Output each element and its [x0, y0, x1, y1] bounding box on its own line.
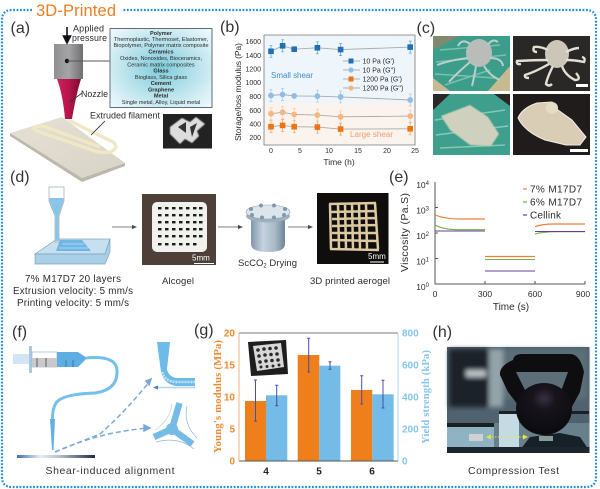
alcogel photo [142, 194, 216, 265]
label h: (h) [432, 324, 452, 341]
x axis ticks: 5 [298, 148, 302, 155]
y axis title: Storage/loss modulus (Pa) [233, 43, 243, 141]
axes [435, 182, 585, 284]
right axis ticks: 400 [402, 392, 419, 404]
panel: f, shear alignment schematic [12, 324, 197, 477]
legend [343, 58, 403, 92]
materials box [110, 28, 212, 108]
y axis ticks: 2 [426, 232, 430, 238]
panel: g, bar chart [194, 322, 432, 478]
left axis title: Young's modulus (MPa) [213, 340, 224, 453]
y axis ticks: 10 [416, 256, 426, 266]
print head cylinder [54, 44, 83, 79]
y axis ticks: 10 [416, 282, 426, 292]
x axis ticks [433, 289, 590, 299]
panel: c, printed octopus and part photos [416, 20, 590, 155]
y axis ticks: 1400 [245, 53, 261, 60]
x axis title: Time (h) [323, 157, 355, 167]
label g: (g) [194, 322, 214, 339]
y axis ticks: 1200 [245, 66, 261, 74]
arrow to alcogel [112, 225, 136, 229]
drying caption: Drying [267, 258, 297, 269]
y axis ticks: 800 [249, 94, 261, 101]
right axis ticks [402, 328, 419, 468]
legend: 10 Pa (G'') [362, 67, 396, 74]
materials box: Single metal, Alloy, Liquid metal [122, 100, 200, 106]
blue bars [266, 366, 394, 461]
inset lattice photo [248, 340, 288, 376]
x axis ticks: 900 [576, 289, 590, 299]
label b: (b) [220, 19, 240, 36]
title: 3D-Printed [36, 2, 116, 20]
photo: cream part on black [513, 94, 590, 155]
left axis ticks: 20 [224, 328, 235, 340]
arrow to aerogel [288, 225, 312, 229]
pointer dot and line [65, 59, 110, 63]
x axis ticks: 4 [263, 466, 269, 478]
y axis ticks: 1600 [245, 39, 261, 46]
alcogel photo: 5mm [192, 254, 210, 262]
photo: white octopus on black [513, 36, 590, 91]
panel: e, viscosity chart [389, 169, 590, 313]
right axis ticks: 0 [402, 456, 408, 468]
substrate gradient bar [17, 455, 95, 458]
materials box: Thermoplastic, Thermoset, Elastomer, [114, 37, 209, 43]
label d: (d) [10, 169, 30, 186]
left axis ticks: 10 [224, 392, 235, 404]
nozzle label [70, 89, 108, 102]
x axis title: Time (s) [493, 302, 529, 313]
x axis ticks: 600 [528, 289, 542, 299]
error bars [254, 338, 384, 421]
printing schematic [35, 187, 110, 264]
printing parameters: 7% M17D7 20 layers [25, 274, 121, 285]
tube and needle [50, 358, 117, 450]
left axis ticks: 5 [229, 424, 235, 436]
y axis ticks: 1 [426, 258, 430, 264]
materials box: Biopolymer, Polymer matrix composite [113, 43, 209, 49]
legend: Cellink [530, 210, 562, 222]
label e: (e) [389, 169, 409, 186]
scCO2 drying vessel [246, 204, 290, 252]
right axis ticks: 800 [402, 328, 419, 340]
right axis ticks: 200 [402, 424, 419, 436]
x axis ticks [269, 148, 419, 155]
materials box: Oxides, Nonoxides, Bioceramics, [120, 56, 202, 62]
orange bars [245, 355, 372, 461]
label a: (a) [10, 20, 30, 37]
materials box: Polymer [150, 31, 173, 37]
nozzle tip [57, 79, 81, 119]
left axis ticks [224, 328, 235, 468]
series 10 Pa G' [268, 40, 413, 57]
legend: 1200 Pa (G'') [362, 85, 403, 92]
photo: printed octopus on green board [433, 36, 510, 91]
x axis ticks: 300 [478, 289, 492, 299]
photo: translucent part on green board [433, 94, 510, 155]
nozzle label: Nozzle [81, 89, 108, 99]
x axis ticks: 0 [433, 289, 438, 299]
filament label: Extruded filament [90, 110, 160, 120]
legend: 6% M17D7 [530, 198, 582, 208]
materials box: Cement [151, 81, 171, 87]
channel bend detail [153, 342, 195, 390]
pressure label: pressure [72, 33, 107, 43]
right axis ticks: 600 [402, 360, 419, 372]
caption h: Compression Test [468, 465, 559, 477]
build plate [10, 117, 125, 182]
panel: a, extrusion printing schematic [10, 20, 212, 182]
y axis ticks: 10 [416, 180, 426, 190]
syringe [13, 346, 87, 373]
panel: d, printing and drying workflow [10, 169, 390, 309]
aerogel photo: 5mm [368, 252, 386, 261]
x axis ticks: 25 [411, 148, 419, 155]
aerogel photo [317, 193, 388, 264]
caption f: Shear-induced alignment [46, 465, 175, 477]
y axis ticks: 3 [426, 206, 430, 212]
materials box: Ceramic matrix composites [127, 62, 195, 68]
materials box: Ceramics [148, 50, 174, 56]
drying caption: 2 [263, 264, 267, 270]
shaded regions [264, 35, 415, 145]
axes [264, 35, 415, 145]
panel: h, compression test [432, 324, 590, 477]
alcogel caption: Alcogel [162, 276, 194, 287]
axes [239, 333, 398, 461]
aerogel caption: 3D printed aerogel [310, 276, 390, 287]
y axis ticks: 10 [416, 231, 426, 241]
filament label [90, 110, 160, 135]
x axis ticks: 15 [354, 148, 362, 155]
label f: (f) [12, 324, 27, 341]
legend: 7% M17D7 [530, 184, 582, 196]
three-way junction detail [154, 403, 197, 449]
y axis ticks [245, 39, 261, 142]
compression test photo [447, 347, 590, 453]
y axis ticks: 200 [249, 135, 261, 142]
legend: 1200 Pa (G') [362, 76, 402, 83]
dashed arrows [55, 379, 151, 452]
x axis ticks: 0 [269, 148, 273, 155]
large shear label: Large shear [350, 130, 393, 139]
small shear label: Small shear [271, 71, 313, 80]
arrow to drying [218, 225, 242, 229]
x axis ticks: 20 [383, 148, 391, 155]
right axis title: Yield strength (kPa) [421, 350, 432, 444]
x axis ticks: 10 [325, 148, 333, 155]
left axis ticks: 0 [229, 456, 235, 468]
drying caption: ScCO [238, 258, 263, 269]
y axis title: Viscosity (Pa.S) [399, 193, 411, 272]
label c: (c) [416, 20, 435, 37]
printing parameters [13, 274, 133, 309]
y axis ticks: 10 [416, 206, 426, 216]
printing parameters: Extrusion velocity: 5 mm/s [13, 286, 133, 297]
left axis ticks: 15 [224, 360, 235, 372]
series 10 Pa G'' [268, 88, 413, 106]
x axis ticks: 5 [316, 466, 322, 478]
curve Cellink [435, 231, 585, 271]
materials box: Metal [154, 94, 169, 100]
legend: 10 Pa (G') [362, 58, 394, 65]
printing parameters: Printing velocity: 5 mm/s [17, 298, 129, 309]
materials box: Glass [153, 69, 169, 75]
extruded filament [34, 120, 116, 152]
series 1200 Pa G' [268, 119, 413, 135]
x axis ticks: 6 [369, 466, 375, 478]
curve 7% M17D7 [435, 215, 585, 256]
applied pressure label: Applied [73, 24, 104, 34]
y axis ticks [416, 180, 430, 292]
y axis ticks: 600 [249, 108, 261, 115]
y axis ticks: 4 [426, 181, 430, 187]
micrograph inset [163, 114, 212, 148]
pressure arrow [64, 27, 70, 43]
materials box: Graphene [148, 87, 174, 93]
y axis ticks: 0 [426, 283, 430, 289]
y axis ticks: 1000 [245, 80, 261, 87]
curve 6% M17D7 [435, 225, 585, 260]
legend [523, 184, 582, 222]
x axis ticks [263, 466, 375, 478]
y axis ticks: 400 [249, 122, 261, 128]
panel: b, modulus chart [220, 19, 419, 167]
materials box: Bioglass, Silica glass [135, 75, 187, 81]
series 1200 Pa G'' [268, 106, 413, 123]
